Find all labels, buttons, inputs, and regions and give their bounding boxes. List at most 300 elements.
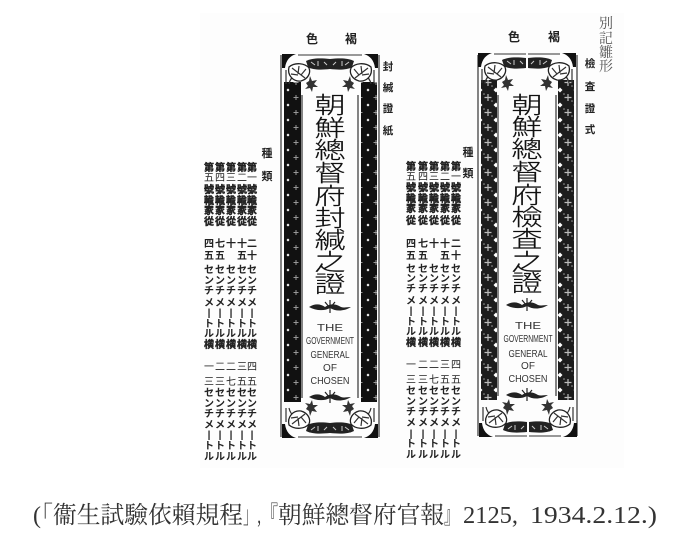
unit: centimetres, length: セ <box>418 385 428 397</box>
column: no. 2: 號 <box>237 183 247 196</box>
side label: inspection certificate form: 檢 <box>585 57 596 70</box>
main title: Government-General of Chosen inspection certificate: 證 <box>511 270 543 296</box>
English inscription: THE <box>515 321 541 332</box>
side label: sealing certificate: 封 <box>383 60 394 73</box>
unit: centimetres, length: セ <box>451 385 461 397</box>
unit: centimetres, width: チ <box>406 283 416 295</box>
width values: 七 <box>418 238 428 250</box>
unit: centimetres, length: ン <box>215 399 225 410</box>
unit: centimetres, length <box>204 387 257 463</box>
unit: centimetres, length: ン <box>237 399 247 410</box>
bottom ornament <box>479 399 577 437</box>
column: no. 4: 第 <box>418 160 428 173</box>
length values: 五 <box>440 375 450 386</box>
heading: types: 種 <box>462 145 474 159</box>
unit: centimetres, length: ン <box>226 399 236 410</box>
width values: 十 <box>247 249 257 262</box>
unit: centimetres, length: | <box>230 430 233 441</box>
column: no. 4: 家 <box>215 204 225 217</box>
ornament below English text <box>506 388 548 401</box>
unit: centimetres, length: ル <box>418 450 428 461</box>
unit: centimetres, length: セ <box>247 387 257 399</box>
main title: Government-General of Chosen inspection certificate: 査 <box>511 226 543 252</box>
main title: Government-General of Chosen inspection certificate: 檢 <box>511 204 543 230</box>
column: no. 5: 五 <box>204 173 214 184</box>
column: no. 2 <box>440 160 450 227</box>
column: no. 1 <box>451 160 461 227</box>
form: sealing certificate paper (left) <box>281 31 394 438</box>
main title: Government-General of Chosen sealing certificate: 封 <box>314 205 346 231</box>
unit: centimetres, width: ン <box>215 276 225 287</box>
column: no. 1: 一 <box>247 173 257 184</box>
main title: Government-General of Chosen inspection certificate: 朝 <box>511 92 543 118</box>
English inscription: OF <box>521 361 535 372</box>
column: no. 5: 號 <box>204 183 214 196</box>
width values: 七 <box>215 238 225 250</box>
width values: 五 <box>406 250 416 262</box>
unit: centimetres, width: ル <box>451 327 461 338</box>
top colour label <box>306 31 357 46</box>
unit: centimetres, length: ル <box>429 450 439 461</box>
column: no. 4: 四 <box>215 173 225 184</box>
unit: centimetres, width: セ <box>237 264 247 276</box>
unit: centimetres, length: チ <box>440 406 450 418</box>
unit: centimetres, width: チ <box>247 285 257 297</box>
unit: centimetres, length: ン <box>406 397 416 408</box>
length values: 三 <box>215 377 225 388</box>
heading: types: 種 <box>262 146 272 160</box>
unit: centimetres, width: ル <box>226 329 236 340</box>
unit: centimetres, width: メ <box>247 298 257 309</box>
unit: centimetres, width: チ <box>215 285 225 297</box>
column: no. 3: 第 <box>429 160 439 173</box>
ornamental band: right <box>361 82 377 402</box>
unit: centimetres, width: メ <box>440 296 450 307</box>
unit: centimetres, width: メ <box>204 298 214 309</box>
unit: centimetres, length: | <box>410 429 413 440</box>
unit: centimetres, width <box>204 264 257 351</box>
unit: centimetres, length: メ <box>226 420 236 431</box>
unit: centimetres, width: | <box>433 306 436 317</box>
unit: centimetres, length: ト <box>429 439 439 450</box>
unit: centimetres, length: | <box>219 430 222 441</box>
unit: centimetres, length: チ <box>226 408 236 420</box>
background: scanned page area <box>200 13 624 468</box>
unit: centimetres, width: メ <box>226 298 236 309</box>
unit: centimetres, width: メ <box>215 298 225 309</box>
column: no. 3: 三 <box>226 173 236 184</box>
unit: centimetres, length: メ <box>440 418 450 429</box>
unit: centimetres, width: セ <box>418 263 428 275</box>
unit: centimetres, width: セ <box>440 263 450 275</box>
unit: centimetres, width: チ <box>440 283 450 295</box>
length values: 一 <box>406 360 416 371</box>
side label: inspection certificate form <box>585 57 596 136</box>
side label: appended form: 形 <box>599 59 613 75</box>
unit: centimetres, width: チ <box>429 283 439 295</box>
unit: centimetres, width: ル <box>406 327 416 338</box>
unit: centimetres, length: ル <box>215 452 225 463</box>
width values <box>204 237 257 262</box>
column: no. 1: 輸 <box>247 194 257 207</box>
column: no. 4: 從 <box>215 215 225 228</box>
length values: 七 <box>226 376 236 388</box>
unit: centimetres, length: メ <box>237 420 247 431</box>
unit: centimetres, length: ト <box>237 441 247 452</box>
bottom ornament <box>282 400 378 438</box>
unit: centimetres, length: チ <box>215 408 225 420</box>
column: no. 2: 二 <box>440 172 450 183</box>
length values: 三 <box>406 375 416 386</box>
unit: centimetres, width: 横 <box>418 336 428 349</box>
main title: Government-General of Chosen inspection certificate: 之 <box>511 249 543 275</box>
column: no. 2: 從 <box>440 214 450 227</box>
unit: centimetres, width: ル <box>440 327 450 338</box>
unit: centimetres, length: メ <box>429 418 439 429</box>
unit: centimetres, width: ル <box>204 329 214 340</box>
length values: 四 <box>451 360 461 371</box>
column: no. 3: 三 <box>429 172 439 183</box>
column: no. 2: 家 <box>237 204 247 217</box>
unit: centimetres, width: ト <box>226 319 236 330</box>
side label: inspection certificate form: 査 <box>585 80 596 93</box>
unit: centimetres, width: セ <box>429 263 439 275</box>
column: no. 2: 家 <box>440 202 450 215</box>
ornamental band: right <box>558 80 574 400</box>
unit: centimetres, width: ト <box>215 319 225 330</box>
column: no. 5: 輸 <box>204 194 214 207</box>
unit: centimetres, width: セ <box>204 264 214 276</box>
unit: centimetres, length: | <box>433 429 436 440</box>
column: no. 5: 號 <box>406 181 416 194</box>
unit: centimetres, width: ト <box>418 317 428 328</box>
column: no. 1: 一 <box>451 172 461 183</box>
length values: 五 <box>451 375 461 386</box>
unit: centimetres, width: | <box>422 306 425 317</box>
unit: centimetres, length: ル <box>247 452 257 463</box>
unit: centimetres, width: ト <box>429 317 439 328</box>
width values: 五 <box>204 250 214 262</box>
column: no. 2: 二 <box>237 173 247 184</box>
side label: appended form <box>599 16 613 75</box>
unit: centimetres, length: | <box>208 430 211 441</box>
column: no. 2: 輸 <box>237 194 247 207</box>
column: no. 5 <box>406 160 416 227</box>
unit: centimetres, width: 横 <box>204 338 214 351</box>
unit: centimetres, width: 横 <box>429 336 439 349</box>
unit: centimetres, width: ン <box>451 274 461 285</box>
column: no. 3: 號 <box>429 181 439 194</box>
unit: centimetres, width: ト <box>451 317 461 328</box>
width values <box>406 237 461 262</box>
unit: centimetres, width: メ <box>418 296 428 307</box>
unit: centimetres, width: ン <box>406 274 416 285</box>
main title: Government-General of Chosen sealing certificate: 緘 <box>314 227 346 253</box>
main title: Government-General of Chosen sealing certificate <box>314 92 346 297</box>
unit: centimetres, length: ル <box>226 452 236 463</box>
main title: Government-General of Chosen inspection certificate <box>511 92 543 296</box>
English inscription: OF <box>323 363 337 374</box>
width values: 二 <box>247 239 257 250</box>
main title: Government-General of Chosen sealing certificate: 朝 <box>314 92 346 118</box>
main title: Government-General of Chosen sealing certificate: 鮮 <box>314 115 346 141</box>
column: no. 4: 輸 <box>418 192 428 205</box>
unit: centimetres, width: | <box>230 308 233 319</box>
unit: centimetres, width: ル <box>429 327 439 338</box>
right table: types and sizes <box>406 145 474 461</box>
caption: source citation: 朝鮮總督府官報 <box>278 502 444 529</box>
unit: centimetres, length: ン <box>204 399 214 410</box>
unit: centimetres, length: チ <box>451 406 461 418</box>
column: no. 2: 號 <box>440 181 450 194</box>
length values: 七 <box>429 374 439 386</box>
side label: sealing certificate: 緘 <box>383 81 394 94</box>
form: inspection certificate (right) <box>478 16 613 437</box>
column: no. 5: 第 <box>204 161 214 174</box>
heading: types: 類 <box>262 169 272 183</box>
side label: appended form: 別 <box>599 16 613 32</box>
unit: centimetres, length: | <box>251 430 254 441</box>
unit: centimetres, width: ン <box>429 274 439 285</box>
unit: centimetres, width: ル <box>247 329 257 340</box>
main title: Government-General of Chosen inspection certificate: 府 <box>511 182 543 208</box>
top ornament <box>478 53 576 91</box>
unit: centimetres, length: ト <box>226 441 236 452</box>
unit: centimetres, width: ト <box>406 317 416 328</box>
length values: 三 <box>418 375 428 386</box>
column: no. 1: 家 <box>247 204 257 217</box>
main title: Government-General of Chosen inspection certificate: 督 <box>511 159 543 185</box>
caption: source citation: 」, <box>243 503 261 529</box>
unit: centimetres, width: チ <box>451 283 461 295</box>
unit: centimetres, length: メ <box>247 420 257 431</box>
column: no. 2: 輸 <box>440 192 450 205</box>
column: no. 4: 輸 <box>215 194 225 207</box>
unit: centimetres, width: ン <box>247 276 257 287</box>
unit: centimetres, length: ル <box>406 450 416 461</box>
English inscription: GENERAL <box>310 350 350 361</box>
unit: centimetres, length: ト <box>204 441 214 452</box>
unit: centimetres, length: メ <box>215 420 225 431</box>
unit: centimetres, length: ル <box>204 452 214 463</box>
column: no. 5: 輸 <box>406 192 416 205</box>
unit: centimetres, length: チ <box>247 408 257 420</box>
unit: centimetres, width: 横 <box>247 338 257 351</box>
main title: Government-General of Chosen sealing certificate: 證 <box>314 271 346 297</box>
width values: 五 <box>215 250 225 262</box>
unit: centimetres, length: チ <box>204 408 214 420</box>
unit: centimetres, length: チ <box>418 406 428 418</box>
unit: centimetres, width: | <box>241 308 244 319</box>
heading: types: 類 <box>462 166 474 180</box>
unit: centimetres, length: | <box>241 430 244 441</box>
unit: centimetres, width: ル <box>418 327 428 338</box>
column: no. 5: 從 <box>204 215 214 228</box>
unit: centimetres, length: ル <box>237 452 247 463</box>
caption: source citation: 』 <box>444 503 459 529</box>
length values: 三 <box>237 362 247 373</box>
unit: centimetres, length: セ <box>226 387 236 399</box>
length values <box>406 360 461 386</box>
column: no. 5: 五 <box>406 172 416 183</box>
unit: centimetres, width: セ <box>247 264 257 276</box>
column: no. 3 <box>429 160 439 227</box>
unit: centimetres, length: セ <box>204 387 214 399</box>
unit: centimetres, width: セ <box>406 263 416 275</box>
side label: sealing certificate <box>383 60 394 137</box>
unit: centimetres, width: ル <box>215 329 225 340</box>
unit: centimetres, width: セ <box>451 263 461 275</box>
unit: centimetres, width: ン <box>226 276 236 287</box>
column: no. 1: 號 <box>451 181 461 194</box>
column: no. 4: 從 <box>418 214 428 227</box>
unit: centimetres, width: ン <box>440 274 450 285</box>
width values: 十 <box>226 237 236 250</box>
width values: 四 <box>406 238 416 250</box>
caption: source citation <box>33 502 657 529</box>
column: no. 1: 第 <box>247 161 257 174</box>
column: no. 5: 家 <box>406 202 416 215</box>
unit: centimetres, length: ン <box>418 397 428 408</box>
main title: Government-General of Chosen sealing certificate: 總 <box>314 137 346 163</box>
length values: 三 <box>440 360 450 371</box>
column: no. 1: 從 <box>247 215 257 228</box>
main title: Government-General of Chosen inspection certificate: 鮮 <box>511 114 543 140</box>
length values: 二 <box>418 360 428 371</box>
length values: 五 <box>237 377 247 388</box>
unit: centimetres, length: | <box>422 429 425 440</box>
unit: centimetres, width: ト <box>237 319 247 330</box>
column: no. 1: 第 <box>451 160 461 173</box>
outer frame lines <box>478 55 577 436</box>
unit: centimetres, width: セ <box>215 264 225 276</box>
unit: centimetres, width: 横 <box>440 336 450 349</box>
width values: 十 <box>429 237 439 250</box>
width values: 十 <box>451 249 461 262</box>
column: no. 5 <box>204 161 214 228</box>
unit: centimetres, length: メ <box>204 420 214 431</box>
unit: centimetres, width: | <box>208 308 211 319</box>
unit: centimetres, width: | <box>444 306 447 317</box>
unit: centimetres, length: ル <box>451 450 461 461</box>
unit: centimetres, length: ン <box>429 397 439 408</box>
column: no. 4 <box>215 161 225 228</box>
unit: centimetres, length: ト <box>247 441 257 452</box>
unit: centimetres, width: ト <box>440 317 450 328</box>
English inscription <box>306 323 354 387</box>
unit: centimetres, length: チ <box>406 406 416 418</box>
unit: centimetres, width: | <box>219 308 222 319</box>
unit: centimetres, length: メ <box>406 418 416 429</box>
unit: centimetres, width: メ <box>237 298 247 309</box>
unit: centimetres, length: ト <box>215 441 225 452</box>
length values: 五 <box>247 377 257 388</box>
caption: source citation: 衞生試驗依賴規程 <box>53 502 243 529</box>
top ornament <box>282 54 378 92</box>
length values: 二 <box>429 360 439 371</box>
width values: 五 <box>237 250 247 262</box>
unit: centimetres, width: | <box>410 306 413 317</box>
ornament above English text <box>506 298 548 311</box>
column: no. 3: 輸 <box>226 194 236 207</box>
unit: centimetres, width: チ <box>204 285 214 297</box>
unit: centimetres, length: ト <box>406 439 416 450</box>
English inscription: GOVERNMENT <box>306 336 354 347</box>
length values <box>204 362 257 388</box>
heading: types <box>462 145 474 180</box>
unit: centimetres, length: ン <box>451 397 461 408</box>
unit: centimetres, length: セ <box>406 385 416 397</box>
top colour label: 色 <box>306 31 318 46</box>
width values: 五 <box>418 250 428 262</box>
unit: centimetres, width: メ <box>451 296 461 307</box>
unit: centimetres, length: ト <box>451 439 461 450</box>
unit: centimetres, length: | <box>444 429 447 440</box>
unit: centimetres, length: | <box>455 429 458 440</box>
length values: 三 <box>204 377 214 388</box>
unit: centimetres, width: 横 <box>226 338 236 351</box>
unit: centimetres, width: | <box>251 308 254 319</box>
column: no. 3: 從 <box>429 214 439 227</box>
column: no. 1: 輸 <box>451 192 461 205</box>
top colour label: 褐 <box>345 31 357 46</box>
main title: Government-General of Chosen sealing certificate: 府 <box>314 183 346 209</box>
unit: centimetres, width: セ <box>226 264 236 276</box>
column: no. 5: 從 <box>406 214 416 227</box>
top colour label: 色 <box>508 29 520 44</box>
caption: source citation: 『 <box>261 502 278 529</box>
side label: inspection certificate form: 證 <box>585 102 596 115</box>
English inscription <box>504 321 552 385</box>
caption: source citation: (「 <box>33 502 53 529</box>
column: no. 4: 家 <box>418 202 428 215</box>
unit: centimetres, width: | <box>455 306 458 317</box>
unit: centimetres, length: セ <box>237 387 247 399</box>
unit: centimetres, length: ン <box>440 397 450 408</box>
ornament below English text <box>309 390 351 403</box>
width values: 十 <box>440 237 450 250</box>
unit: centimetres, width <box>406 263 461 349</box>
unit: centimetres, length: ン <box>247 399 257 410</box>
unit: centimetres, width: ト <box>204 319 214 330</box>
unit: centimetres, width: 横 <box>215 338 225 351</box>
unit: centimetres, length: ト <box>418 439 428 450</box>
column: no. 2: 從 <box>237 215 247 228</box>
unit: centimetres, length: チ <box>429 406 439 418</box>
length values: 二 <box>226 362 236 373</box>
column: no. 3 <box>226 161 236 228</box>
column: no. 4: 號 <box>418 181 428 194</box>
column: no. 4: 號 <box>215 183 225 196</box>
unit: centimetres, width: メ <box>429 296 439 307</box>
unit: centimetres, width: 横 <box>237 338 247 351</box>
ornamental band: left <box>481 80 497 400</box>
English inscription: GENERAL <box>508 349 548 360</box>
side label: sealing certificate: 紙 <box>383 124 394 137</box>
column: no. 3: 從 <box>226 215 236 228</box>
English inscription: CHOSEN <box>310 376 350 387</box>
column: no. 2: 第 <box>237 161 247 174</box>
ornament above English text <box>309 300 351 313</box>
unit: centimetres, width: チ <box>418 283 428 295</box>
column: no. 1: 家 <box>451 202 461 215</box>
unit: centimetres, width: 横 <box>451 336 461 349</box>
English inscription: CHOSEN <box>508 374 548 385</box>
column: no. 3: 家 <box>429 202 439 215</box>
unit: centimetres, length: セ <box>429 385 439 397</box>
column: no. 5: 第 <box>406 160 416 173</box>
unit: centimetres, length: メ <box>418 418 428 429</box>
